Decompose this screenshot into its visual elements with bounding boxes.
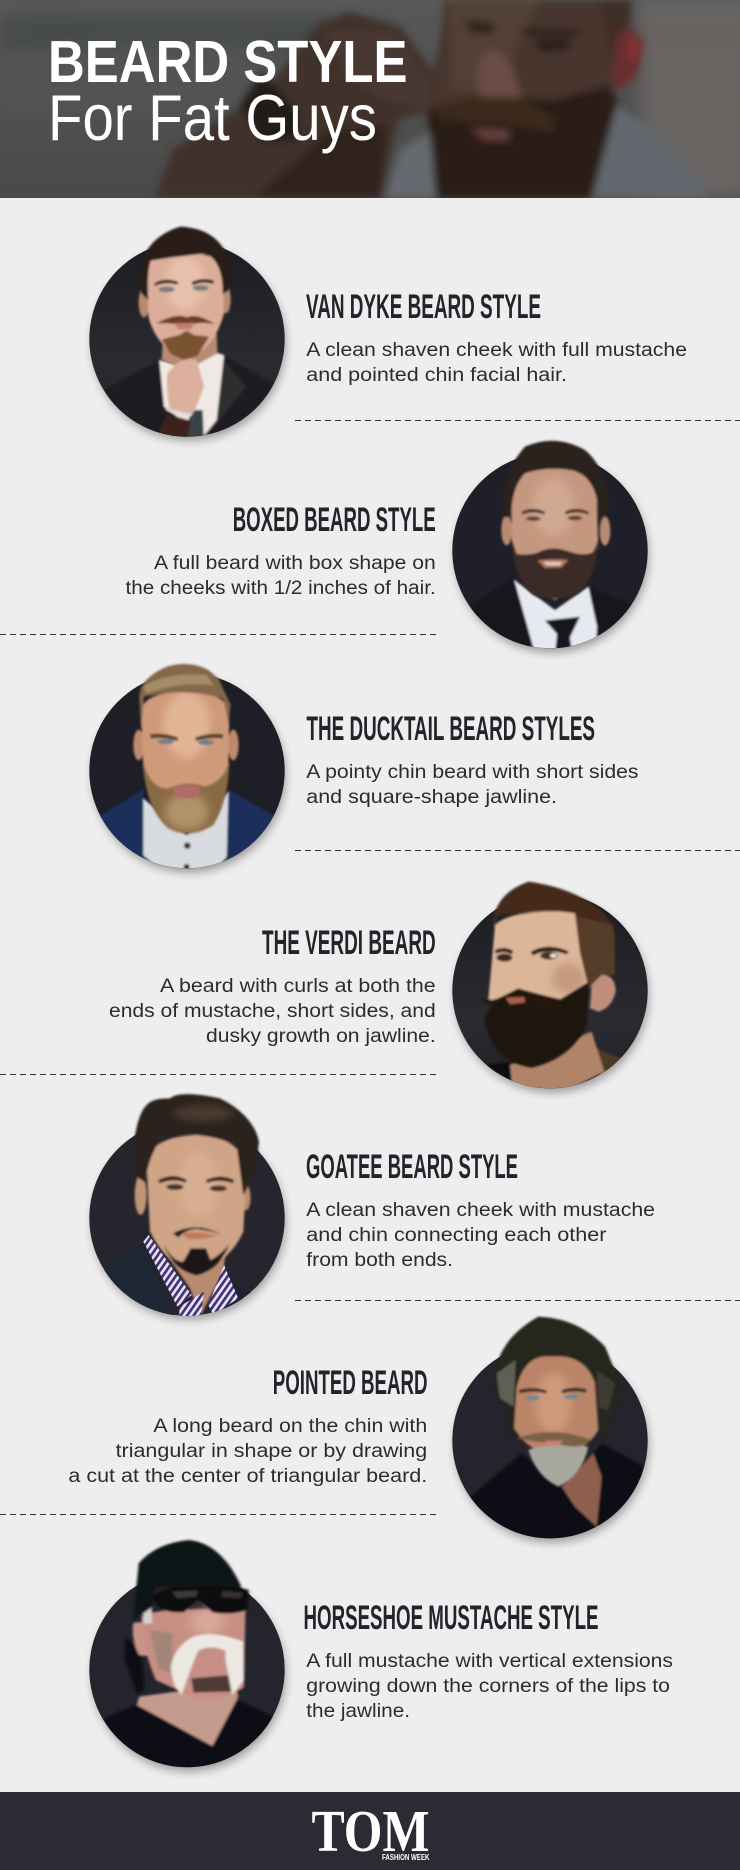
description: A full mustache with vertical extensions xyxy=(306,1651,673,1672)
row 7: Horseshoe xyxy=(89,1540,673,1777)
description: and pointed chin facial hair. xyxy=(306,365,567,386)
portrait: goatee man xyxy=(89,1094,285,1319)
description: and square-shape jawline. xyxy=(306,787,557,808)
description: A clean shaven cheek with mustache xyxy=(306,1200,655,1221)
description: the cheeks with 1/2 inches of hair. xyxy=(126,578,436,599)
description xyxy=(306,340,687,386)
description: the jawline. xyxy=(306,1701,410,1722)
description: ends of mustache, short sides, and xyxy=(109,1001,436,1022)
row 1: Van Dyke xyxy=(87,227,687,447)
description xyxy=(126,553,436,599)
row 6: Pointed xyxy=(68,1317,648,1543)
footer band xyxy=(0,1792,740,1870)
row 3: Ducktail xyxy=(89,664,639,875)
portrait: Verdi beard man xyxy=(452,882,648,1095)
header banner xyxy=(0,0,740,198)
portrait: pointed beard man xyxy=(452,1317,648,1543)
heading: POINTED BEARD xyxy=(273,1364,428,1402)
portrait: Van Dyke man xyxy=(87,227,293,447)
description xyxy=(109,976,436,1047)
logo: TOM Fashion Week: TOM xyxy=(312,1798,430,1864)
logo: TOM Fashion Week: FASHION WEEK xyxy=(382,1852,430,1862)
row 4: Verdi xyxy=(109,882,648,1095)
description xyxy=(68,1416,427,1487)
row 2: Boxed beard xyxy=(126,441,648,653)
description: and chin connecting each other xyxy=(306,1225,607,1246)
portrait: ducktail man xyxy=(89,664,285,875)
portrait: horseshoe mustache man xyxy=(89,1540,285,1777)
heading: GOATEE BEARD STYLE xyxy=(306,1148,518,1186)
title xyxy=(48,28,408,154)
description: A full beard with box shape on xyxy=(154,553,436,574)
description: growing down the corners of the lips to xyxy=(306,1676,670,1697)
portrait: boxed beard man xyxy=(452,441,648,653)
heading: VAN DYKE BEARD STYLE xyxy=(306,288,541,326)
description xyxy=(306,1651,673,1722)
description: triangular in shape or by drawing xyxy=(116,1441,427,1462)
description: A pointy chin beard with short sides xyxy=(306,762,638,783)
description: A long beard on the chin with xyxy=(153,1416,427,1437)
heading: THE VERDI BEARD xyxy=(262,924,436,962)
description xyxy=(306,762,638,808)
title: For Fat Guys xyxy=(48,81,377,154)
description: A clean shaven cheek with full mustache xyxy=(306,340,687,361)
title: BEARD STYLE xyxy=(48,28,408,95)
header photo: man twisting mustache xyxy=(0,0,740,198)
description xyxy=(306,1200,655,1271)
row 5: Goatee xyxy=(89,1094,655,1319)
description: A beard with curls at both the xyxy=(160,976,436,997)
heading: BOXED BEARD STYLE xyxy=(233,501,436,539)
description: a cut at the center of triangular beard. xyxy=(68,1466,427,1487)
description: from both ends. xyxy=(306,1250,453,1271)
description: dusky growth on jawline. xyxy=(206,1026,436,1047)
